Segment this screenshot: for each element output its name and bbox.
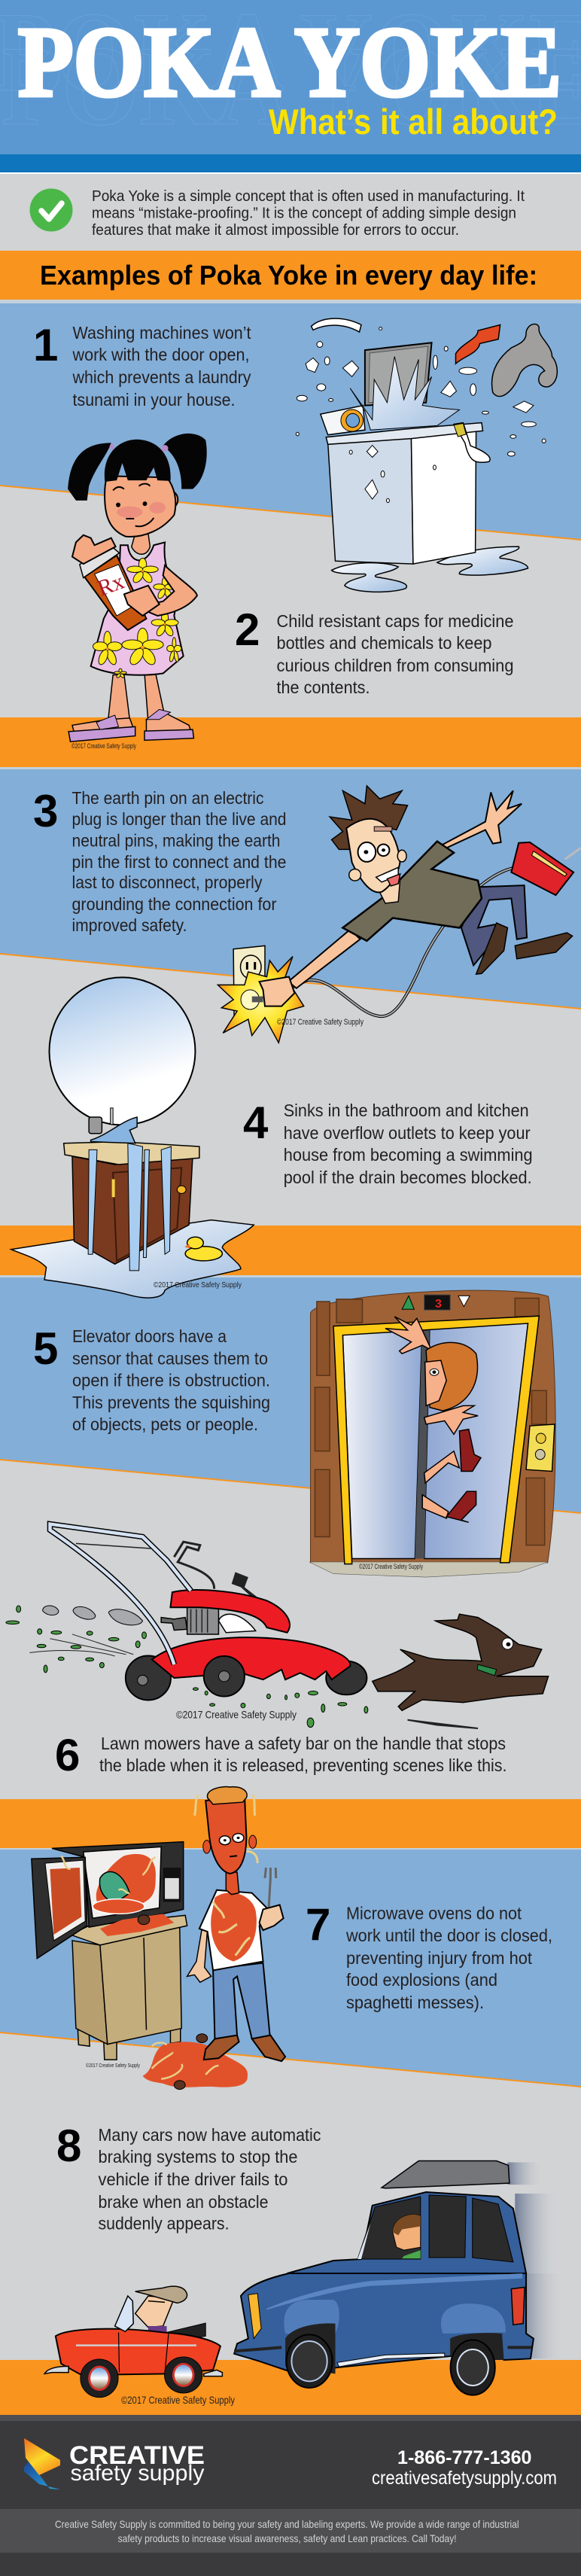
example 8 text [56, 2121, 321, 2233]
panel: introduction [0, 174, 581, 251]
panel: examples heading [0, 251, 581, 303]
example 2 text: curious children from consuming [277, 656, 513, 675]
example 7 text [306, 1899, 552, 2012]
countertop [64, 1142, 199, 1165]
example 2 text: Child resistant caps for medicine [277, 611, 513, 631]
logo wordmark [69, 2441, 205, 2486]
example 4 text [243, 1098, 533, 1187]
arms [443, 790, 522, 849]
panel: examples heading: Examples of Poka Yoke in every day life: [40, 260, 537, 291]
door left [342, 1322, 422, 1559]
example 5 text: open if there is obstruction. [72, 1370, 270, 1390]
example 2 text: 2 [235, 604, 260, 655]
elevator floor [309, 1562, 549, 1577]
example 3 text: grounding the connection for [72, 894, 277, 914]
copyright: ©2017 Creative Safety Supply [176, 1709, 297, 1721]
illustration: spaghetti explosion in microwave [32, 1842, 187, 2060]
control panel [163, 1868, 181, 1902]
example 7 text: food explosions (and [346, 1970, 497, 1990]
example 2 text: bottles and chemicals to keep [277, 633, 492, 653]
example 6 text: the blade when it is released, preventing scenes like this. [99, 1755, 507, 1775]
contact details [372, 2447, 557, 2489]
illustration: woman caught in elevator doors [309, 1290, 555, 1577]
mower body [152, 1637, 350, 1679]
bottle [72, 535, 146, 630]
example 4 text: Sinks in the bathroom and kitchen [284, 1101, 529, 1120]
panel: section 1 and 2 background [0, 303, 581, 769]
illustration: overflowing washing machine [296, 318, 557, 592]
panel: section 3 and 4 background [0, 769, 581, 1277]
head [203, 1787, 257, 1895]
example 4 text: pool if the drain becomes blocked. [284, 1168, 532, 1187]
intro text: means “mistake-proofing.” It is the concept of adding simple design [92, 205, 516, 221]
copyright: ©2017 Creative Safety Supply [154, 1280, 242, 1290]
cabinet [72, 1156, 193, 1264]
logo wordmark: CREATIVE [69, 2441, 205, 2470]
elevator wood wall [311, 1290, 555, 1563]
company statement: safety products to increase visual awareness, safety and Lean practices. Call Today! [118, 2532, 457, 2544]
red car [44, 2286, 222, 2398]
example 5 text: Elevator doors have a [72, 1326, 227, 1346]
copyright: ©2017 Creative Safety Supply [277, 1018, 364, 1027]
example 8 text: 8 [56, 2121, 81, 2171]
legs and sandals [68, 674, 193, 741]
contact details: creativesafetysupply.com [372, 2468, 557, 2489]
microwave body [52, 1842, 184, 1927]
example 7 text: 7 [306, 1899, 330, 1950]
example 1 text: Washing machines won’t [72, 323, 251, 343]
illustration: overflowing sink with mirror and duck [11, 977, 254, 1298]
head [330, 786, 408, 903]
copyright: ©2017 Creative Safety Supply [86, 2062, 140, 2069]
example 7 text: work until the door is closed, [345, 1926, 552, 1945]
shirt [199, 1890, 266, 1970]
illustration: girl with medicine bottle: Rx [94, 569, 127, 601]
example 3 text: pin the first to connect and the [72, 852, 286, 872]
SUV lower [234, 2273, 563, 2395]
mirror [49, 977, 195, 1125]
woman [385, 1317, 481, 1522]
example 3 text: plug is longer than the live and [72, 809, 286, 829]
puddle [11, 1220, 254, 1298]
faucet [91, 1117, 137, 1143]
example 4 text: house from becoming a swimming [284, 1145, 533, 1165]
jeans [213, 1963, 270, 2042]
example 5 text: sensor that causes them to [72, 1349, 268, 1369]
example 5 text: This prevents the squishing [72, 1393, 270, 1412]
example 4 text: 4 [243, 1098, 269, 1148]
shoes [204, 2036, 239, 2060]
exhaust smoke [43, 1606, 143, 1625]
panel: section 5 and 6 background [0, 1277, 581, 1850]
SUV upper [287, 2161, 558, 2273]
example 3 text [33, 786, 286, 935]
example 1 text: 1 [33, 320, 58, 370]
copyright: ©2017 Creative Safety Supply [71, 742, 136, 750]
door right [424, 1323, 528, 1559]
logo wordmark: safety supply [71, 2461, 205, 2486]
mower handle [50, 1524, 214, 1664]
left arm [187, 1929, 211, 1982]
example 8 text: brake when an obstacle [98, 2192, 268, 2212]
door knob [177, 1186, 186, 1194]
microwave door [32, 1857, 87, 1959]
button panel [526, 1424, 555, 1471]
example 2 text: the contents. [277, 677, 370, 697]
example 6 text: 6 [55, 1730, 80, 1780]
sauce pile [143, 2042, 248, 2087]
illustration: blue SUV about to hit red car [44, 2161, 563, 2406]
example 5 text: 5 [33, 1323, 58, 1374]
mower rear wheel [126, 1656, 171, 1700]
example 7 text: preventing injury from hot [346, 1948, 533, 1968]
contact details: 1-866-777-1360 [397, 2447, 531, 2468]
example 6 text: Lawn mowers have a safety bar on the handle that stops [101, 1734, 506, 1753]
icon: green check mark [30, 188, 72, 232]
hand [124, 586, 160, 616]
example 3 text: improved safety. [72, 915, 187, 935]
dress [91, 542, 184, 675]
company statement [55, 2518, 519, 2544]
copyright: ©2017 Creative Safety Supply [359, 1563, 423, 1570]
example 6 text [55, 1730, 507, 1780]
intro text: Poka Yoke is a simple concept that is often used in manufacturing. It [92, 187, 525, 205]
example 8 text: vehicle if the driver fails to [98, 2170, 287, 2189]
example 2 text [235, 604, 513, 697]
rubber duck [184, 1237, 222, 1261]
right hand and fork [265, 1868, 276, 1911]
toaster [511, 842, 573, 895]
example 3 text: 3 [33, 786, 58, 836]
intro text: features that make it almost impossible for errors to occur. [92, 221, 459, 239]
intro text [92, 187, 525, 239]
mower engine [161, 1572, 257, 1634]
example 7 text: Microwave ovens do not [346, 1903, 522, 1923]
illustration: runaway lawn mower and dog [6, 1524, 549, 1728]
mower front wheel [204, 1656, 245, 1697]
example 7 text: spaghetti messes). [346, 1993, 484, 2012]
cord [287, 867, 517, 1016]
illustration: man shocked at electric plug [217, 786, 581, 1043]
spark burst [217, 957, 304, 1043]
example 4 text: have overflow outlets to keep your [284, 1123, 531, 1143]
example 3 text: The earth pin on an electric [72, 788, 263, 808]
shirt [342, 842, 482, 941]
speed lines and clippings [6, 1606, 368, 1728]
example 1 text: work with the door open, [72, 345, 250, 364]
arm [137, 565, 197, 616]
spilled sauce on counter [100, 1914, 174, 1936]
example 5 text: of objects, pets or people. [72, 1414, 258, 1434]
example 5 text [33, 1323, 270, 1434]
water streams [88, 1143, 171, 1271]
example 8 text: suddenly appears. [98, 2213, 229, 2233]
example 1 text [33, 320, 251, 410]
example 1 text: tsunami in your house. [72, 390, 235, 410]
logo icon [24, 2438, 60, 2489]
copyright: ©2017 Creative Safety Supply [121, 2394, 235, 2406]
floor indicator [402, 1295, 470, 1310]
illustration: woman caught in elevator doors: 3 [435, 1298, 442, 1311]
panel: footer [0, 2415, 581, 2576]
outlet [233, 945, 265, 1019]
panel: section 7 and 8 background [0, 1850, 581, 2415]
example 3 text: last to disconnect, properly [72, 872, 263, 892]
example 1 text: which prevents a laundry [72, 367, 251, 387]
example 3 text: neutral pins, making the earth [72, 831, 280, 851]
spaghetti strands [194, 1795, 257, 1956]
bowl [99, 1871, 129, 1904]
illustration: man covered in spaghetti [143, 1787, 285, 2090]
dog [373, 1614, 549, 1728]
example 8 text: braking systems to stop the [98, 2147, 298, 2166]
cabinet [71, 1915, 187, 2060]
head [68, 434, 207, 554]
example 8 text: Many cars now have automatic [98, 2125, 321, 2145]
illustration: girl with medicine bottle [68, 434, 207, 750]
legs and shoes [461, 885, 573, 974]
door frame [333, 1316, 539, 1564]
company statement: Creative Safety Supply is committed to being your safety and labeling experts. We provide a wide range of industrial [55, 2518, 519, 2530]
